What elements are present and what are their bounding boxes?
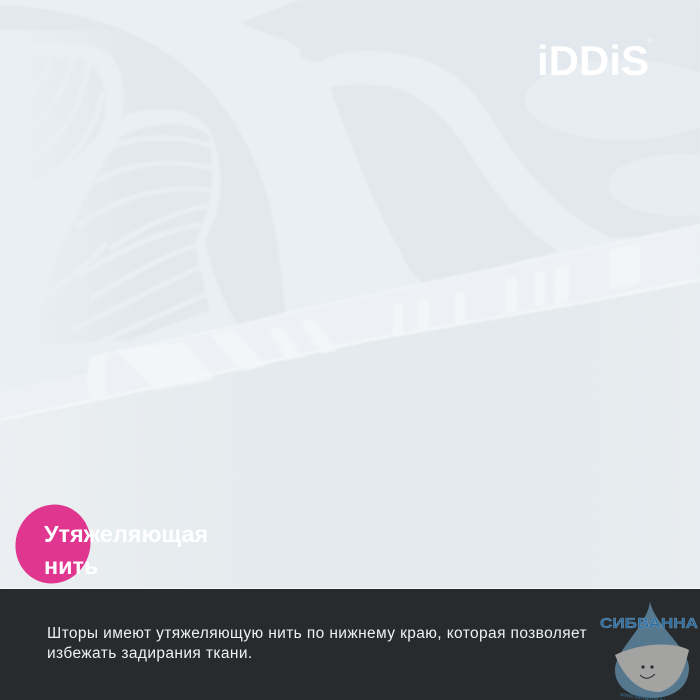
logo: iddis: ® — [648, 38, 653, 45]
leaf one veins — [0, 60, 102, 198]
light blob right — [608, 154, 700, 216]
leaf two veins — [38, 138, 212, 345]
body text: избежать задирания ткани. — [47, 645, 253, 662]
leaf one — [0, 43, 123, 225]
leaf two interior — [39, 124, 212, 345]
icon: water drop — [615, 601, 689, 698]
hem fold lip — [87, 352, 108, 398]
hem top edge — [90, 225, 700, 358]
heading: нить — [44, 553, 98, 579]
lower fabric — [0, 280, 700, 590]
logo: iddis: iDDiS — [537, 37, 649, 84]
textured dome behind leaves — [0, 5, 286, 400]
hem seam — [0, 280, 700, 420]
hem band — [0, 225, 700, 420]
body text: Шторы имеют утяжеляющую нить по нижнему краю, которая позволяет — [47, 625, 587, 642]
bath face — [640, 665, 655, 678]
footer band — [0, 588, 700, 700]
pink blob — [4, 494, 102, 594]
lower fabric highlight — [0, 280, 700, 590]
heading: Утяжеляющая — [44, 521, 208, 547]
hem stripes — [115, 243, 640, 390]
leaf one interior — [0, 57, 106, 200]
heading — [44, 521, 208, 579]
light sweeping arc band — [190, 0, 610, 320]
brand name: СИБВАННА — [600, 615, 698, 632]
textured top right fabric — [300, 0, 700, 320]
top triangle weave — [240, 0, 350, 62]
light blob upper right — [525, 60, 700, 140]
body text — [47, 625, 587, 662]
icon: bath — [615, 645, 689, 692]
left fade over leaves — [0, 30, 150, 410]
leaf two — [0, 109, 238, 395]
